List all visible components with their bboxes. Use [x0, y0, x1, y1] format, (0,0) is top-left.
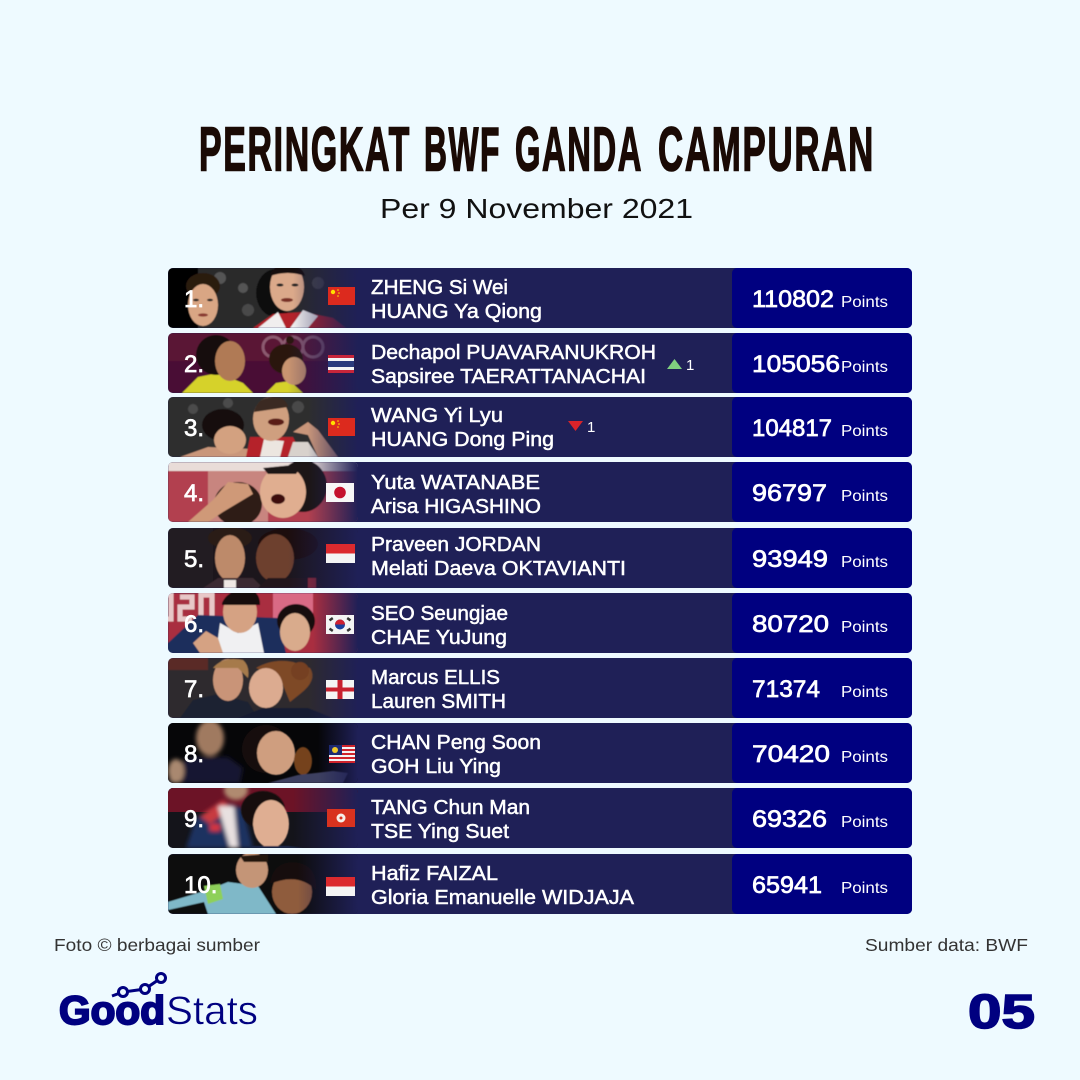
flag: Indonesia: [326, 544, 355, 563]
logo: GoodStats: [59, 974, 258, 1033]
photo 3: [168, 397, 358, 457]
title: GANDA: [515, 116, 643, 184]
flag: South Korea: [326, 615, 354, 634]
photo credit: Foto © berbagai sumber: [54, 935, 260, 955]
names 1: [371, 277, 542, 323]
row 1: [168, 263, 912, 328]
names 1: ZHENG Si Wei: [371, 277, 508, 299]
title: CAMPURAN: [658, 116, 875, 184]
trend up 1: 1: [686, 357, 694, 374]
rank 7: 7.: [184, 676, 204, 703]
points panel 5: Points: [841, 554, 888, 571]
photo 4: [168, 460, 358, 526]
title: BWF: [424, 116, 501, 184]
flag: Hong Kong: [327, 809, 355, 827]
rank 10: 10.: [184, 872, 217, 899]
rank 6: 6.: [184, 611, 204, 638]
points panel 2: 105056: [752, 351, 840, 378]
points panel 7: 71374: [752, 676, 820, 703]
row 10: [168, 852, 912, 914]
points panel 4: [732, 462, 912, 522]
rank 3: 3.: [184, 415, 204, 442]
row 9: [168, 788, 912, 848]
names 6: SEO Seungjae: [371, 603, 508, 625]
points panel 8: Points: [841, 749, 888, 766]
points panel 1: [732, 268, 912, 328]
names 9: [371, 797, 530, 843]
photo 8: [168, 720, 358, 783]
names 4: [371, 472, 541, 518]
names 8: GOH Liu Ying: [371, 756, 501, 778]
points panel 7: [732, 658, 912, 718]
rank 8: 8.: [184, 741, 204, 768]
photo 10: [168, 852, 358, 914]
data source: Sumber data: BWF: [865, 935, 1028, 955]
points panel 10: [732, 854, 912, 914]
names 6: CHAE YuJung: [371, 627, 507, 649]
names 3: HUANG Dong Ping: [371, 429, 554, 451]
points panel 7: Points: [841, 684, 888, 701]
names 9: TANG Chun Man: [371, 797, 530, 819]
points panel 3: 104817: [752, 415, 832, 442]
names 7: Lauren SMITH: [371, 691, 506, 713]
row 8: [168, 720, 912, 783]
names 8: CHAN Peng Soon: [371, 732, 541, 754]
photo 2: [168, 333, 358, 393]
row 5: [168, 527, 912, 588]
photo 9: [168, 788, 358, 848]
points panel 1: 110802: [752, 286, 834, 313]
names 4: Yuta WATANABE: [371, 472, 540, 494]
subtitle: Per 9 November 2021: [380, 193, 693, 224]
names 10: [371, 863, 635, 909]
points panel 9: 69326: [752, 806, 827, 833]
names 6: [371, 603, 508, 649]
title: [199, 116, 875, 184]
points panel 5: [732, 528, 912, 588]
flag: China: [328, 418, 355, 436]
points panel 3: Points: [841, 423, 888, 440]
names 5: Melati Daeva OKTAVIANTI: [371, 558, 626, 580]
names 5: Praveen JORDAN: [371, 534, 541, 556]
points panel 1: Points: [841, 294, 888, 311]
row 6: [160, 590, 912, 653]
points panel 8: [732, 723, 912, 783]
photo 1: [168, 263, 358, 328]
rank 5: 5.: [184, 546, 204, 573]
points panel 3: [732, 397, 912, 457]
points panel 8: 70420: [752, 741, 830, 768]
points panel 2: Points: [841, 359, 888, 376]
names 8: [371, 732, 541, 778]
points panel 5: 93949: [752, 546, 828, 573]
points panel 10: 65941: [752, 872, 822, 899]
points panel 6: [732, 593, 912, 653]
rank 4: 4.: [184, 480, 204, 507]
row 7: [168, 658, 912, 718]
names 2: Dechapol PUAVARANUKROH: [371, 342, 656, 364]
trend up 1: [667, 357, 694, 374]
rank 2: 2.: [184, 351, 204, 378]
names 7: [371, 667, 506, 713]
names 2: [371, 342, 656, 388]
page number: 05: [968, 986, 1035, 1039]
points panel 4: Points: [841, 488, 888, 505]
points panel 4: 96797: [752, 480, 827, 507]
flag: England: [326, 680, 354, 699]
names 9: TSE Ying Suet: [371, 821, 509, 843]
names 2: Sapsiree TAERATTANACHAI: [371, 366, 646, 388]
row 2: [168, 333, 912, 393]
points panel 2: [732, 333, 912, 393]
trend down 1: 1: [587, 419, 595, 436]
flag: China: [328, 287, 355, 305]
names 10: Gloria Emanuelle WIDJAJA: [371, 887, 635, 909]
photo 6: [160, 590, 358, 653]
points panel 9: Points: [841, 814, 888, 831]
points panel 9: [732, 788, 912, 848]
row 3: [168, 397, 912, 457]
flag: Thailand: [328, 355, 354, 373]
names 5: [371, 534, 626, 580]
names 3: [371, 405, 554, 451]
logo: GoodStats: Good: [59, 989, 165, 1033]
flag: Indonesia: [326, 877, 355, 896]
names 4: Arisa HIGASHINO: [371, 496, 541, 518]
photo 5: [168, 527, 358, 588]
logo: GoodStats: Stats: [166, 989, 258, 1033]
names 3: WANG Yi Lyu: [371, 405, 503, 427]
title: PERINGKAT: [199, 116, 411, 184]
row 4: [168, 460, 912, 526]
flag: Japan: [326, 483, 354, 502]
names 1: HUANG Ya Qiong: [371, 301, 542, 323]
names 7: Marcus ELLIS: [371, 667, 500, 689]
rank 9: 9.: [184, 806, 204, 833]
points panel 6: 80720: [752, 611, 829, 638]
flag: Malaysia: [329, 745, 355, 763]
rank 1: 1.: [184, 286, 204, 313]
trend down 1: [568, 419, 595, 436]
points panel 10: Points: [841, 880, 888, 897]
names 10: Hafiz FAIZAL: [371, 863, 498, 885]
photo 7: [168, 658, 358, 718]
points panel 6: Points: [841, 619, 888, 636]
